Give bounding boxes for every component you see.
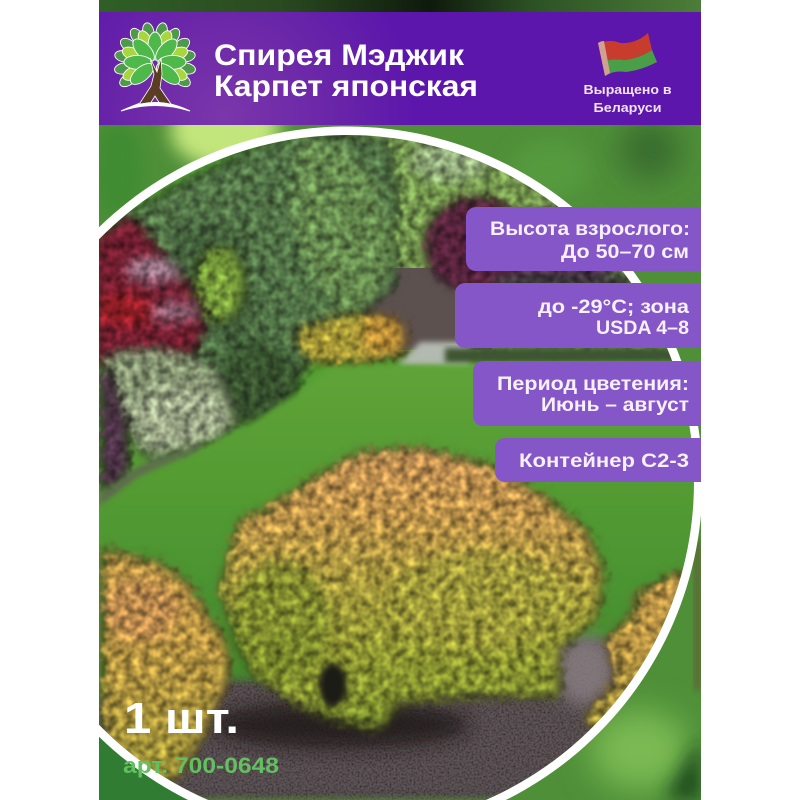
- pill: container: Контейнер С2-3: [519, 451, 689, 472]
- made in Belarus label: Беларуси: [594, 101, 662, 115]
- pill: hardiness: до -29°C; зона: [538, 297, 689, 318]
- pill: height: Высота взрослого:: [490, 219, 690, 240]
- far hedge: [445, 348, 695, 363]
- dark shrubs behind the pills: [423, 195, 635, 345]
- weeping tree: [192, 243, 248, 325]
- made in Belarus label: [584, 83, 672, 115]
- variegated shrub: [100, 345, 240, 462]
- tree crown: [114, 22, 196, 89]
- red maple: [90, 212, 207, 370]
- fence: [362, 268, 492, 350]
- pill: flowering period: Июнь – август: [541, 395, 689, 416]
- conifer: [99, 130, 401, 428]
- left spirea bush: [99, 545, 232, 785]
- dark purple shrub: [99, 368, 132, 495]
- pill: height: До 50–70 см: [561, 242, 689, 263]
- icon: Belarus flag: [598, 33, 657, 76]
- tree trunk: [130, 58, 180, 107]
- gravel path: [99, 640, 660, 800]
- path: [398, 342, 470, 370]
- made in Belarus label: Выращено в: [584, 83, 672, 97]
- yellow shrub row: [292, 311, 409, 367]
- lawn: [99, 362, 694, 700]
- pill: container: [495, 438, 701, 482]
- pill: hardiness: USDA 4–8: [596, 318, 689, 339]
- quantity: 1 шт.: [124, 694, 239, 743]
- right spirea bush: [581, 566, 682, 730]
- ground arcs: [121, 102, 190, 111]
- title: [214, 39, 478, 103]
- white circular frame: [99, 126, 703, 800]
- header banner: [99, 12, 701, 125]
- background: blurred garden behind the photo: [92, 0, 701, 800]
- pill: flowering period: Период цветения:: [497, 374, 689, 395]
- title: Карпет японская: [214, 70, 478, 103]
- background trees: [324, 135, 672, 364]
- pill: hardiness: [455, 283, 701, 348]
- photo: garden with spirea bushes: [90, 125, 701, 800]
- dark lawn edge: [99, 446, 199, 506]
- pill: flowering period: [473, 361, 701, 426]
- main spirea bush: [216, 445, 607, 733]
- bush hollow shadow: [319, 663, 347, 707]
- logo: tree: [114, 22, 196, 111]
- pill: height: [466, 207, 701, 271]
- article number: арт. 700-0648: [123, 753, 279, 778]
- title: Спирея Мэджик: [214, 39, 465, 72]
